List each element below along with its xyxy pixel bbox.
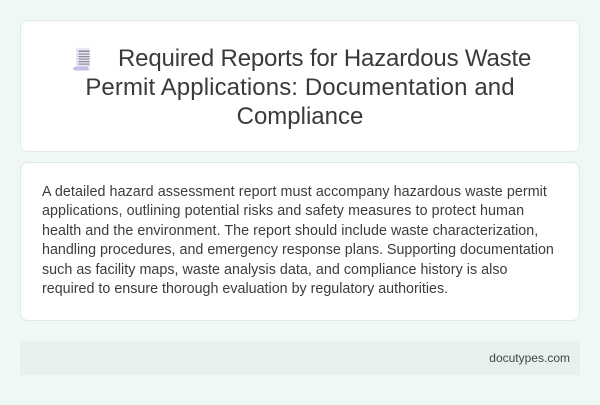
title: Compliance (237, 103, 363, 130)
text block: description: A detailed hazard assessment report must accompany hazardous waste permit (42, 184, 547, 200)
text block: description (42, 184, 554, 297)
title (85, 45, 531, 130)
title: Required Reports for Hazardous Waste (118, 45, 531, 72)
panel: description card (20, 162, 580, 321)
title: Permit Applications: Documentation and (85, 74, 515, 101)
text block: description: such as facility maps, waste analysis data, and compliance history is also (42, 262, 508, 278)
panel: title card (20, 20, 580, 152)
text block: description: handling procedures, and emergency response plans. Supporting documentation (42, 242, 554, 258)
text block: description: applications, outlining potential risks and safety measures to protect human (42, 203, 524, 219)
text block: description: health and the environment. The report should include waste characterization, (42, 223, 538, 239)
footer text: source: docutypes.com (489, 351, 570, 365)
icon: report document (73, 48, 90, 70)
footer bar (20, 341, 580, 375)
text block: description: required to ensure thorough evaluation by regulatory authorities. (42, 281, 448, 297)
